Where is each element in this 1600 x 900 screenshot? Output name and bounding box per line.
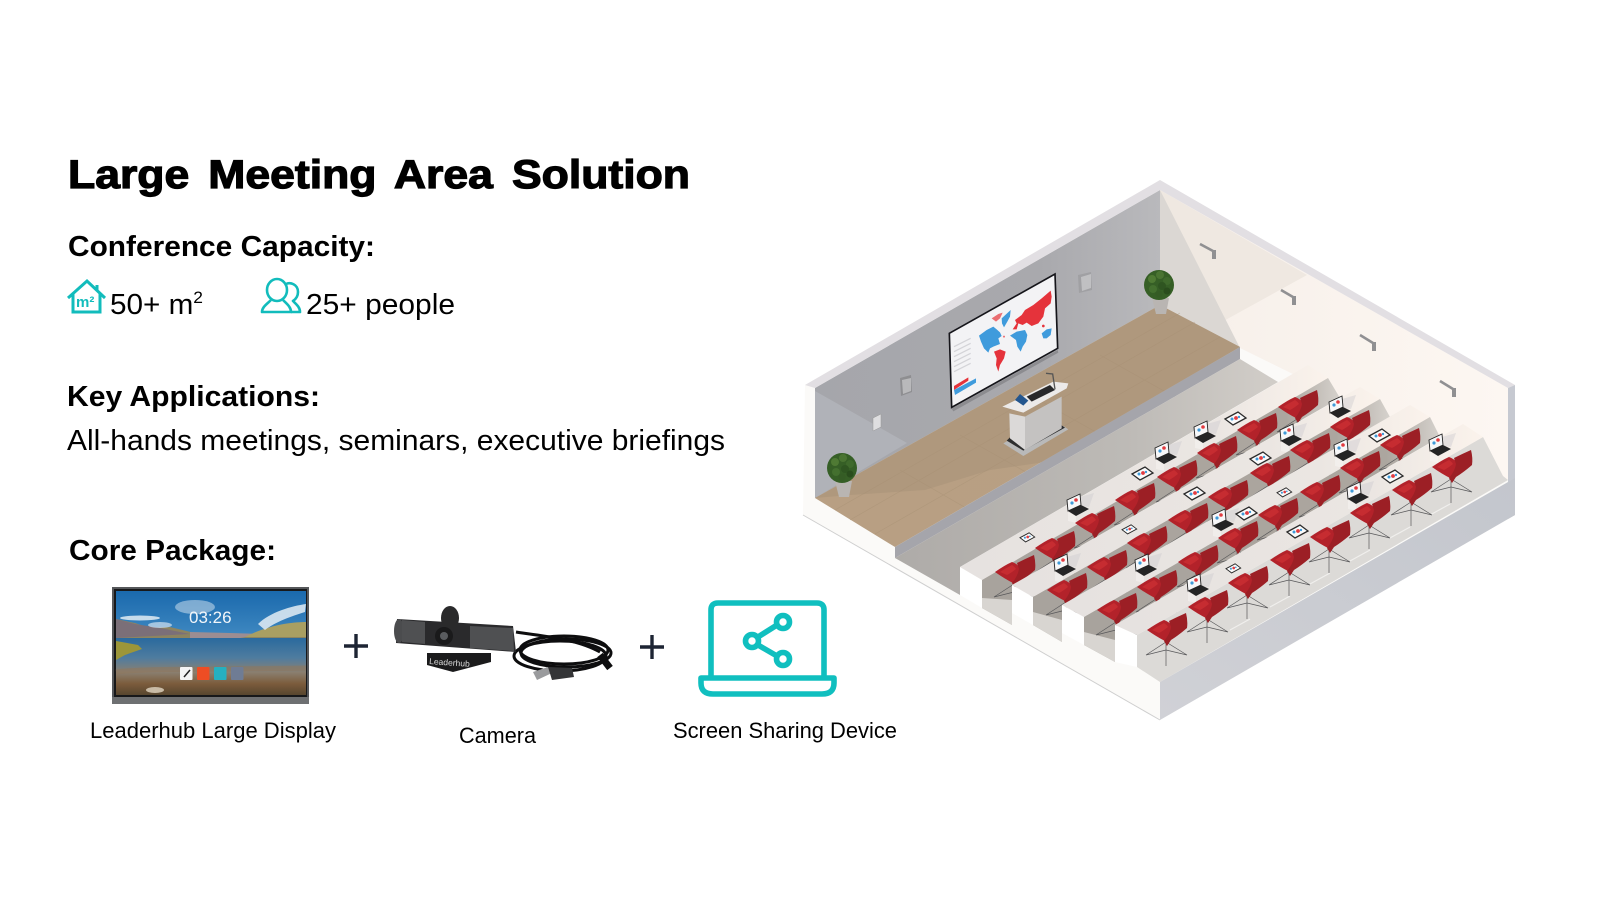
icon: people xyxy=(262,279,300,312)
front block face xyxy=(1160,478,1515,720)
desk row 2 xyxy=(1012,387,1380,625)
wood stage floor xyxy=(815,305,1240,547)
illustration: isometric conference room xyxy=(803,180,1515,720)
chairs row 4 xyxy=(1146,450,1472,666)
wall speaker right xyxy=(1078,272,1092,293)
under-desk gap and chairs row 3 xyxy=(1084,417,1440,662)
stage riser xyxy=(895,347,1240,558)
wall lights xyxy=(1200,244,1454,397)
front floor strip xyxy=(1137,437,1508,682)
aisle floor xyxy=(895,359,1278,595)
plus sign xyxy=(344,634,368,658)
desk row 4 xyxy=(1115,424,1483,667)
lectern xyxy=(1002,373,1068,456)
heading: core package: Core Package: xyxy=(69,535,276,567)
plus sign xyxy=(640,635,664,659)
label: camera: Camera xyxy=(459,723,537,748)
text: area capacity: 50+ m xyxy=(110,289,191,321)
product: large display xyxy=(112,587,309,704)
room base shell xyxy=(803,180,1515,720)
wall top rim xyxy=(805,180,1515,388)
under-desk gap and chairs row 2 xyxy=(1033,399,1390,642)
text: applications list: All-hands meetings, seminars, executive briefings xyxy=(67,425,725,457)
wall plate xyxy=(873,414,881,431)
heading: conference capacity: Conference Capacity: xyxy=(68,231,375,263)
icon: house with m2 xyxy=(68,281,105,312)
plant left xyxy=(827,453,857,497)
desk row 1 xyxy=(960,365,1328,608)
label: large display: Leaderhub Large Display xyxy=(90,718,336,743)
label: screen sharing device: Screen Sharing Device xyxy=(673,718,897,743)
right wall xyxy=(1160,190,1508,480)
back wall xyxy=(815,190,1160,498)
icon: screen sharing laptop xyxy=(701,603,834,694)
wall speaker left xyxy=(900,375,912,396)
title: Large Meeting Area Solution xyxy=(68,153,690,197)
right wall end strip xyxy=(1508,385,1515,519)
under-desk gap and chairs row 1 xyxy=(982,378,1340,625)
product: camera xyxy=(394,606,611,680)
heading: key applications: Key Applications: xyxy=(67,381,320,413)
projection screen with world map xyxy=(949,274,1058,411)
product: camera: Leaderhub xyxy=(429,656,470,669)
plant right xyxy=(1144,270,1174,314)
text: area capacity: 2 xyxy=(193,288,203,307)
desk row 3 xyxy=(1062,405,1430,645)
product: large display: 03:26 xyxy=(189,608,232,627)
icon: house with m2: m² xyxy=(76,294,94,311)
text: people capacity: 25+ people xyxy=(306,289,455,321)
